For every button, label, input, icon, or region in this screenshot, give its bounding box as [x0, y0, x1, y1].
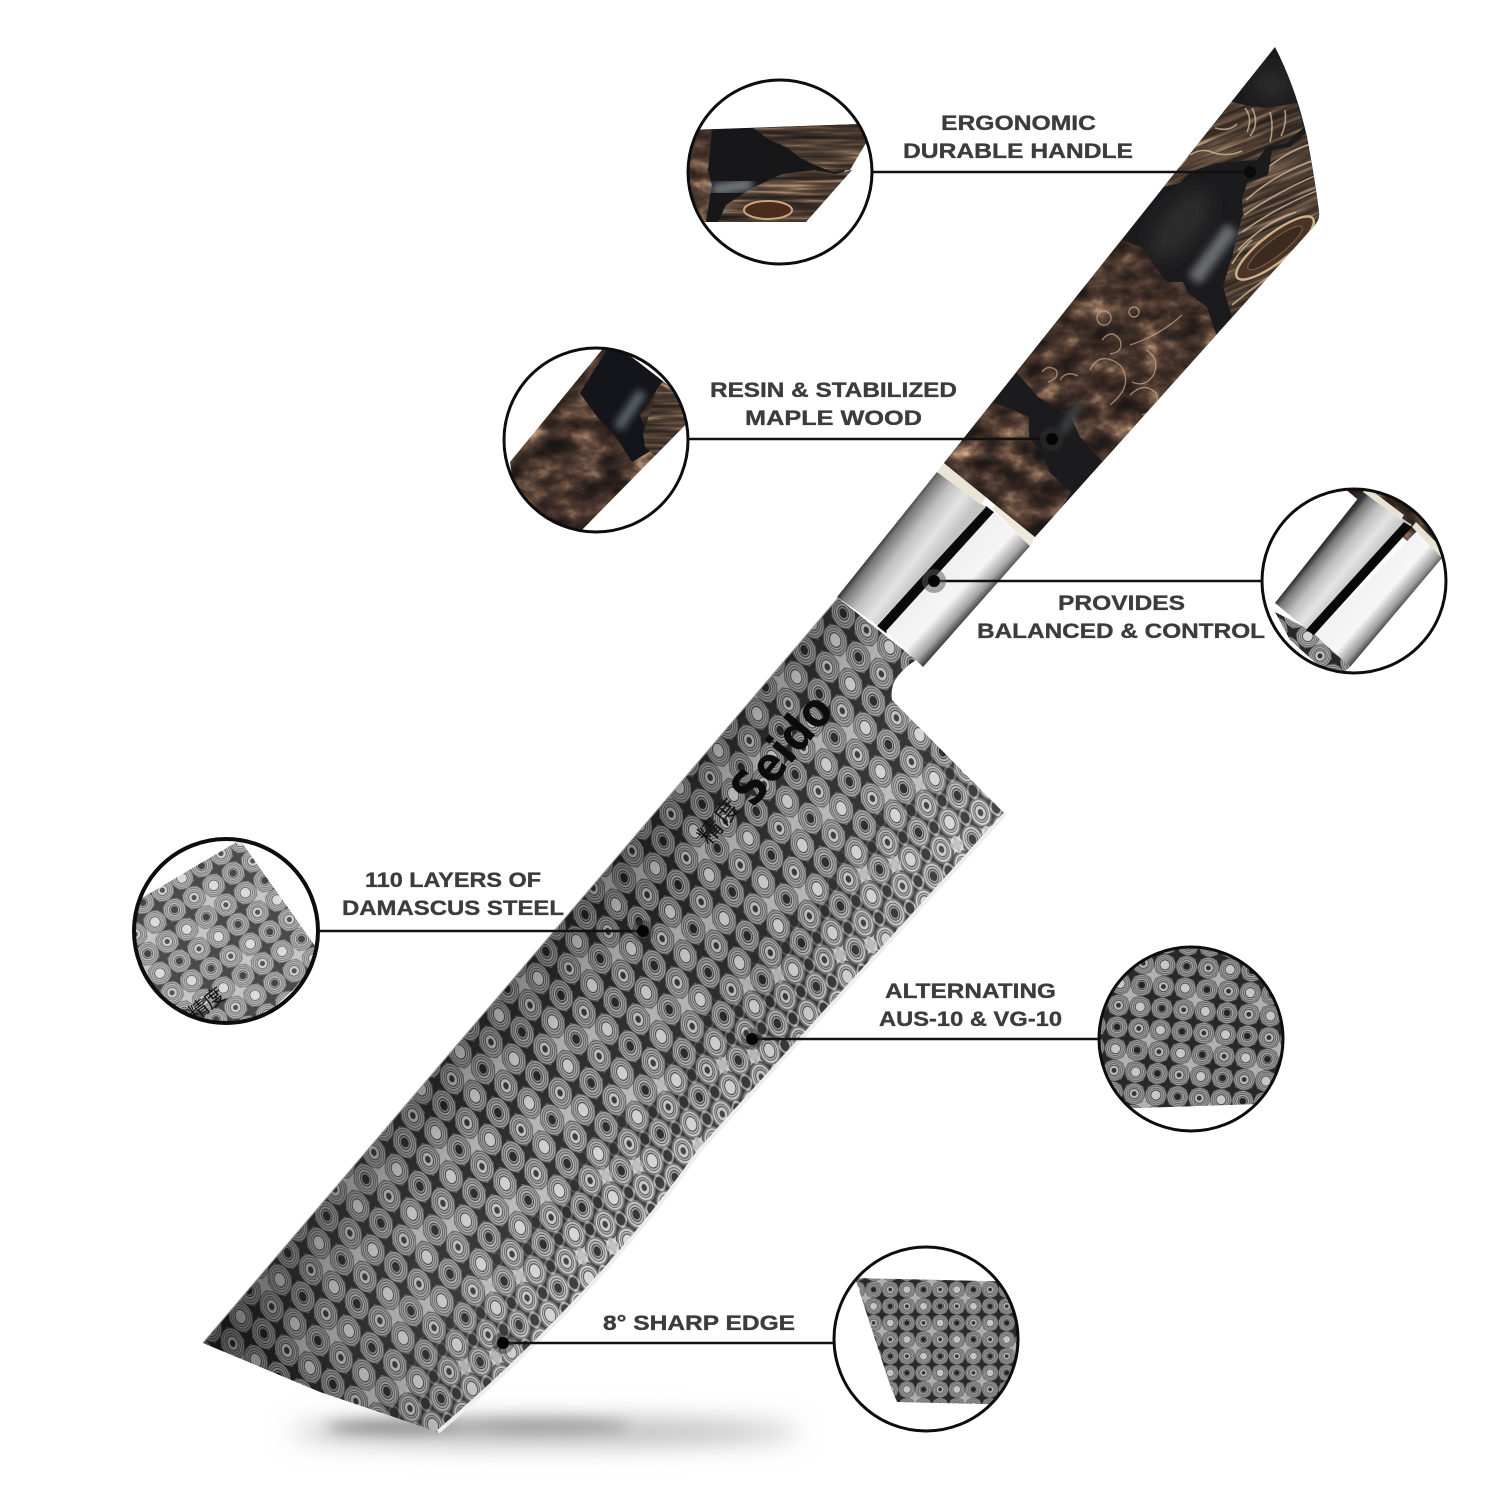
leader: damascus	[319, 920, 654, 942]
label: resin and stabilized maple wood: MAPLE WOOD	[745, 407, 922, 430]
callout: damascus layers inset	[130, 839, 325, 1030]
label: ergonomic durable handle: DURABLE HANDLE	[903, 140, 1133, 163]
leader: handle	[872, 166, 1256, 178]
handle wood: top section	[1164, 102, 1304, 187]
label: alternating aus-10 and vg-10: AUS-10 & VG-10	[879, 1008, 1062, 1031]
label: provides balanced and control: PROVIDES	[1058, 592, 1185, 615]
callout: damascus layers inset: 精度	[184, 983, 230, 1026]
handle wood: lower section near ring	[944, 402, 1071, 537]
callout: resin and maple wood inset	[502, 346, 690, 534]
label: resin and stabilized maple wood: RESIN & STABILIZED	[710, 379, 957, 402]
label: alternating aus-10 and vg-10: ALTERNATING	[885, 980, 1056, 1003]
leader: bolster	[922, 569, 1262, 593]
callout: balance bolster inset	[1260, 488, 1448, 674]
blade logo: 精度	[693, 794, 746, 850]
label: 110 layers of damascus steel: DAMASCUS STEEL	[342, 897, 564, 920]
callout: sharp edge inset	[834, 1247, 1025, 1431]
knife	[203, 30, 1398, 1432]
leader: resin wood	[689, 427, 1064, 451]
label: provides balanced and control	[977, 592, 1265, 643]
callout: alternating steel inset	[1090, 945, 1290, 1131]
label: 110 layers of damascus steel: 110 LAYERS OF	[365, 869, 541, 892]
label: resin and stabilized maple wood	[710, 379, 957, 430]
bolster	[837, 463, 1036, 667]
label: provides balanced and control: BALANCED & CONTROL	[977, 620, 1265, 643]
label: 110 layers of damascus steel	[342, 869, 564, 920]
leader: sharp edge	[492, 1332, 834, 1354]
blade logo	[693, 683, 844, 850]
label: 8 degree sharp edge: 8° SHARP EDGE	[603, 1312, 795, 1335]
callout: ergonomic durable handle inset	[680, 80, 875, 264]
label: alternating aus-10 and vg-10	[879, 980, 1062, 1031]
blade logo: Seido	[720, 683, 844, 817]
label: ergonomic durable handle: ERGONOMIC	[941, 112, 1096, 135]
blade	[203, 598, 1005, 1432]
knife shadow	[290, 1420, 800, 1444]
label: ergonomic durable handle	[903, 112, 1133, 163]
handle gloss highlight	[1194, 228, 1232, 280]
handle wood: right striped section with knot	[1223, 133, 1320, 316]
leader: alternating steel	[741, 1028, 1099, 1050]
handle	[944, 47, 1320, 537]
handle wood: main burl section	[1016, 240, 1216, 462]
